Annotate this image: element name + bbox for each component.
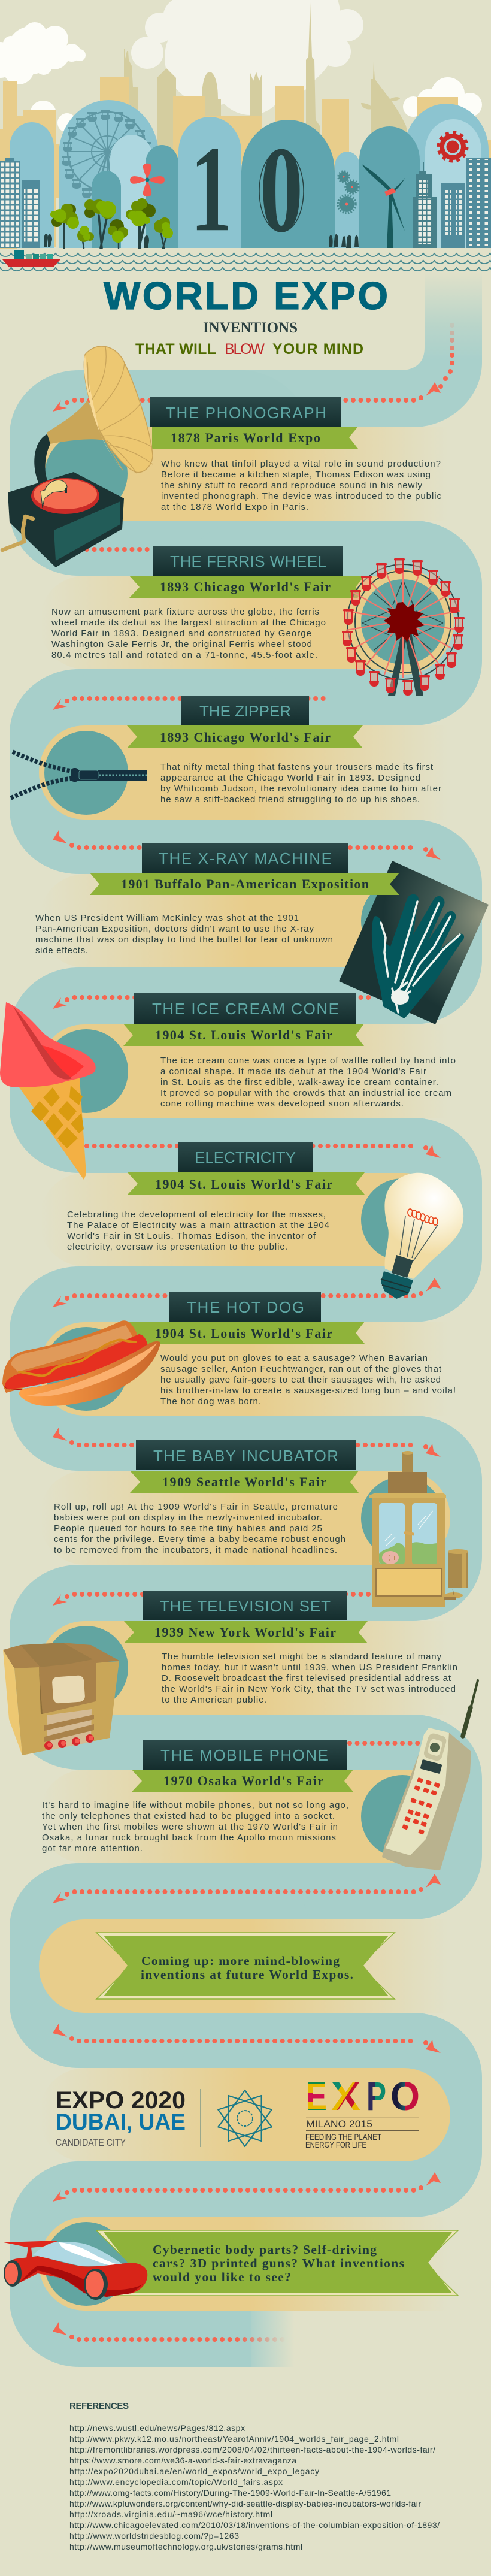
reference list: http://www.worldstridesblog.com/?p=1263: [69, 2531, 239, 2541]
arrowheads: [53, 382, 441, 2335]
panel: the ferris wheel: [51, 546, 465, 696]
logo: expo milano 2015: FEEDING THE PLANET: [305, 2133, 381, 2142]
number ten: 1: [190, 120, 232, 258]
container ship: [2, 250, 60, 267]
tagline: YOUR MIND: [272, 341, 363, 358]
buildings left: [0, 158, 40, 248]
panel: the baby incubator: [54, 1440, 468, 1607]
reference list: http://www.encyclopedia.com/topic/World_fairs.aspx: [69, 2477, 283, 2487]
buildings right: [413, 158, 491, 248]
logo: expo milano 2015: E: [306, 2074, 327, 2119]
body text: People queued for hours to see the tiny babies and paid 25: [54, 1523, 322, 1534]
body text: It's hard to imagine life without mobile phones, but not so long ago,: [42, 1800, 348, 1810]
body text: [35, 913, 333, 956]
body text: by Whitcomb Judson, the revolutionary idea came to him after: [160, 784, 441, 794]
body text: Osaka, a lunar rock brought back from the Apollo moon missions: [42, 1833, 336, 1843]
panel: the phonograph: [2, 346, 442, 567]
heading: [143, 1591, 347, 1620]
dotted route with arrows: [53, 323, 454, 2339]
heading: [153, 546, 343, 576]
main title: WORLD EXPO: [104, 274, 388, 318]
icon: futuristic car: [4, 2241, 147, 2300]
body text: invented phonograph. The device was introduced to the public: [161, 491, 442, 501]
heading: THE ICE CREAM CONE: [152, 1000, 339, 1018]
body text: electricity, oversaw its presentation to the public.: [67, 1242, 287, 1252]
header illustration: city skyline: [0, 0, 491, 258]
reference list: http://www.kpluwonders.org/content/why-did-seattle-display-babies-incubators-worlds-fair: [69, 2499, 421, 2508]
coral propeller: [130, 164, 165, 196]
reference list: http://fremontlibraries.wordpress.com/2008/04/02/thirteen-facts-about-the-1904-worlds-fair/: [69, 2445, 435, 2454]
heading: THE X-RAY MACHINE: [159, 849, 332, 867]
route lines: [74, 400, 419, 2339]
icon: phonograph: [2, 346, 153, 567]
ribbon: [123, 1024, 364, 1046]
heading: [178, 1142, 313, 1172]
logo: expo milano 2015: X: [331, 2074, 360, 2119]
logo: expo 2020 dubai: EXPO 2020: [56, 2087, 186, 2114]
panel: the zipper: [11, 696, 441, 805]
banner: coming up: Coming up: more mind-blowing: [141, 1954, 340, 1968]
body text: The ice cream cone was once a type of waffle rolled by hand into: [160, 1056, 456, 1066]
body text: [67, 1210, 329, 1252]
icon: zipper: [11, 752, 147, 798]
banner: cybernetic question: cars? 3D printed guns? What inventions: [153, 2256, 404, 2270]
heading: [181, 696, 309, 725]
heading: [134, 993, 356, 1024]
icon: ferris wheel: [342, 558, 465, 696]
ribbon: 1893 Chicago World's Fair: [160, 730, 331, 745]
logo: expo 2020 dubai: [56, 2087, 272, 2148]
body text: appearance at the Chicago World Fair in 1893. Designed: [160, 773, 420, 783]
reference list: http://www.chicagoelevated.com/2010/03/18/inventions-of-the-columbian-exposition-of-1893/: [69, 2520, 440, 2530]
heading: [143, 1740, 347, 1770]
tan distant towers: [124, 2, 419, 248]
icon: baby incubator: [369, 1451, 468, 1607]
body text: [54, 1502, 345, 1555]
logo: expo milano 2015: P: [366, 2074, 386, 2119]
body text: It proved so popular with the crowds that an industrial ice cream: [160, 1088, 451, 1098]
ribbon: [90, 873, 399, 895]
reference list: http://news.wustl.edu/news/Pages/812.aspx: [69, 2423, 245, 2433]
reference list: http://www.museumoftechnology.org.uk/stories/grams.html: [69, 2542, 302, 2551]
teal circles: [44, 433, 445, 2306]
body text: a conical shape. It made its debut at the 1904 World's Fair: [160, 1066, 426, 1077]
winding blue road: [10, 271, 482, 2367]
body text: homes today, but it wasn't until 1939, when US President Franklin: [162, 1662, 457, 1673]
body text: he saw a stiff-backed friend struggling to do up his shoes.: [160, 794, 420, 805]
panel: the mobile phone: [42, 1680, 478, 1870]
trees: [50, 198, 173, 248]
logo: expo 2020 dubai: CANDIDATE CITY: [56, 2137, 126, 2148]
inner arches: [92, 117, 335, 248]
body text: D. Roosevelt broadcast the first televised presidential address at: [162, 1673, 451, 1683]
reference list: https://www.smore.com/we36-a-world-s-fair-extravaganza: [69, 2456, 296, 2465]
ribbon: 1970 Osaka World's Fair: [163, 1773, 323, 1788]
references: [69, 2401, 440, 2551]
title block: [104, 274, 388, 358]
body text: [160, 762, 441, 805]
body text: sausage seller, Anton Feuchtwanger, ran out of the gloves that: [160, 1364, 442, 1374]
body text: The humble television set might be a standard feature of many: [162, 1652, 442, 1662]
banner: coming up: inventions at future World Expos.: [141, 1967, 353, 1982]
ferris wheel silhouette: [62, 111, 151, 201]
ribbon: 1878 Paris World Expo: [171, 430, 320, 445]
heading: [169, 1292, 321, 1322]
body text: wheel made its debut as the largest attraction at the Chicago: [51, 618, 326, 628]
tagline: THAT WILL: [135, 341, 216, 358]
tagline: BLOW: [225, 341, 265, 358]
icon: television: [3, 1643, 119, 1755]
body text: The Palace of Electricity was a main attraction at the 1904: [67, 1220, 329, 1230]
reference list: http://expo2020dubai.ae/en/world_expos/world_expo_legacy: [69, 2466, 319, 2476]
ribbon: 1909 Seattle World's Fair: [162, 1474, 326, 1489]
reference list: http://www.omg-facts.com/History/During-The-1909-World-Fair-In-Seattle-A/51961: [69, 2488, 391, 2498]
body text: [51, 607, 326, 660]
panel: electricity: [67, 1142, 463, 1299]
heading: [142, 843, 348, 873]
body text: in St. Louis as the first edible, walk-away ice cream container.: [160, 1077, 438, 1087]
route end dots: [65, 400, 428, 2339]
icon: x-ray of a hand: [339, 861, 489, 1024]
top entry dots: [419, 323, 454, 400]
body text: cone rolling machine was developed soon afterwards.: [160, 1099, 404, 1109]
icon: light bulb: [381, 1173, 463, 1299]
ribbon: [127, 725, 363, 748]
wind turbine: [362, 164, 405, 248]
body text: to be removed from the incubators, it made national headlines.: [54, 1545, 337, 1555]
body text: [160, 1056, 456, 1109]
banner: cybernetic question: would you like to see?: [153, 2270, 291, 2284]
wave rows: [0, 252, 491, 272]
body text: World's Fair in St Louis. Thomas Edison, the inventor of: [67, 1231, 316, 1241]
logo: expo milano 2015: MILANO 2015: [306, 2119, 372, 2130]
gold foreground buildings: [0, 77, 491, 249]
number ten: 0: [260, 122, 303, 258]
red gear: [438, 132, 467, 161]
ribbon: [129, 576, 365, 598]
reference list: [69, 2423, 440, 2551]
reference list: http://xroads.virginia.edu/~ma96/wce/history.html: [69, 2510, 272, 2519]
subtitle inventions: INVENTIONS: [203, 320, 298, 336]
logo: expo milano 2015: O: [390, 2074, 420, 2119]
heading: [136, 1440, 356, 1470]
body text: [160, 1353, 456, 1407]
body text: Before it became a kitchen staple, Thomas Edison was using: [161, 470, 431, 480]
ribbon: [132, 1770, 353, 1792]
heading: [150, 397, 341, 427]
banner: coming up: [96, 1933, 395, 1999]
body text: Washington Gale Ferris Jr, the original Ferris wheel stood: [51, 639, 312, 649]
ribbon: 1904 St. Louis World's Fair: [155, 1027, 332, 1042]
body text: Pan-American Exposition, doctors didn't want to use the X-ray: [35, 924, 314, 934]
icon: mobile phone: [382, 1680, 478, 1870]
reference list: http://www.pkwy.k12.mo.us/northeast/YearofAnniv/1904_worlds_fair_page_2.html: [69, 2434, 399, 2444]
heading: THE PHONOGRAPH: [166, 404, 326, 422]
panel: the x-ray machine: [35, 843, 489, 1024]
body text: When US President William McKinley was shot at the 1901: [35, 913, 299, 923]
body text: World Fair in 1893. Designed and constructed by George: [51, 628, 311, 639]
heading: THE ZIPPER: [199, 702, 291, 720]
tagline: [135, 341, 363, 358]
body text: the shiny stuff to record and reproduce sound in his newly: [161, 480, 423, 491]
heading: THE BABY INCUBATOR: [153, 1447, 338, 1465]
body text: Celebrating the development of electricity for the masses,: [67, 1210, 326, 1220]
ribbon: 1901 Buffalo Pan-American Exposition: [121, 876, 369, 891]
body text: to the American public.: [162, 1695, 266, 1705]
body text: 80.4 metres tall and rotated on a 71-tonne, 45.5-foot axle.: [51, 650, 317, 660]
body text: the only telephones that existed had to be plugged into a socket.: [42, 1811, 335, 1821]
body text: Roll up, roll up! At the 1909 World's Fair in Seattle, premature: [54, 1502, 338, 1512]
people silhouettes: [44, 234, 359, 248]
heading: THE HOT DOG: [187, 1298, 304, 1316]
ribbon: [124, 1621, 368, 1643]
body text: cents for the privilege. Every time a baby became robust enough: [54, 1534, 345, 1544]
heading: ELECTRICITY: [195, 1148, 296, 1166]
small gears: [338, 171, 359, 213]
banner: cybernetic question: [4, 2230, 458, 2300]
heading: THE TELEVISION SET: [160, 1597, 331, 1615]
ribbon: [130, 1471, 359, 1493]
ribbon: [120, 1322, 365, 1344]
ribbon: 1893 Chicago World's Fair: [160, 579, 331, 594]
waves and ship: [0, 250, 491, 272]
body text: got far more attention.: [42, 1843, 143, 1854]
body text: [161, 459, 442, 512]
logo: expo milano 2015: ENERGY FOR LIFE: [305, 2140, 366, 2149]
logo: expo 2020 dubai: DUBAI, UAE: [56, 2109, 186, 2135]
heading: THE FERRIS WHEEL: [170, 552, 326, 570]
body text: he usually gave fair-goers to eat their sausages with, he asked: [160, 1375, 441, 1385]
ribbon: 1939 New York World's Fair: [154, 1625, 336, 1640]
body text: Now an amusement park fixture across the globe, the ferris: [51, 607, 319, 617]
references heading: REFERENCES: [69, 2401, 129, 2411]
clouds: [0, 0, 482, 132]
body text: Would you put on gloves to eat a sausage? When Bavarian: [160, 1353, 428, 1363]
panel: the ice cream cone: [0, 993, 456, 1180]
banner: cybernetic question: Cybernetic body parts? Self-driving: [153, 2242, 377, 2257]
tan text panels: [39, 427, 491, 2311]
body text: machine that was on display to find the bullet for fear of unknown: [35, 935, 333, 945]
body text: the World's Fair in New York City, that the TV set was introduced: [162, 1684, 456, 1694]
number ten: [190, 120, 304, 258]
body text: That nifty metal thing that fastens your trousers made its first: [160, 762, 434, 772]
body text: babies were put on display in the newly-invented incubator.: [54, 1513, 322, 1523]
panel: the television set: [3, 1591, 457, 1755]
icon: ice cream cone: [0, 1002, 96, 1180]
logo: expo milano 2015: [305, 2074, 420, 2149]
ribbon: [128, 1172, 365, 1195]
body text: [162, 1652, 457, 1705]
body text: Who knew that tinfoil played a vital role in sound production?: [161, 459, 441, 469]
body text: his brother-in-law to create a sausage-sized long bun – and voila!: [160, 1386, 456, 1396]
icon: hot dog: [2, 1320, 160, 1406]
body text: [42, 1800, 348, 1854]
body text: at the 1878 World Expo in Paris.: [161, 502, 308, 512]
heading: THE MOBILE PHONE: [160, 1746, 328, 1764]
body text: side effects.: [35, 945, 88, 956]
panel: expo logos: [56, 2074, 420, 2149]
panel: the hot dog: [2, 1292, 456, 1407]
rounded arches: [10, 100, 489, 248]
body text: The hot dog was born.: [160, 1396, 261, 1407]
body text: Yet when the first mobiles were shown at the 1970 World's Fair in: [42, 1822, 338, 1832]
ribbon: 1904 St. Louis World's Fair: [155, 1326, 332, 1341]
ribbon: 1904 St. Louis World's Fair: [155, 1177, 332, 1192]
ribbon: [152, 427, 358, 449]
